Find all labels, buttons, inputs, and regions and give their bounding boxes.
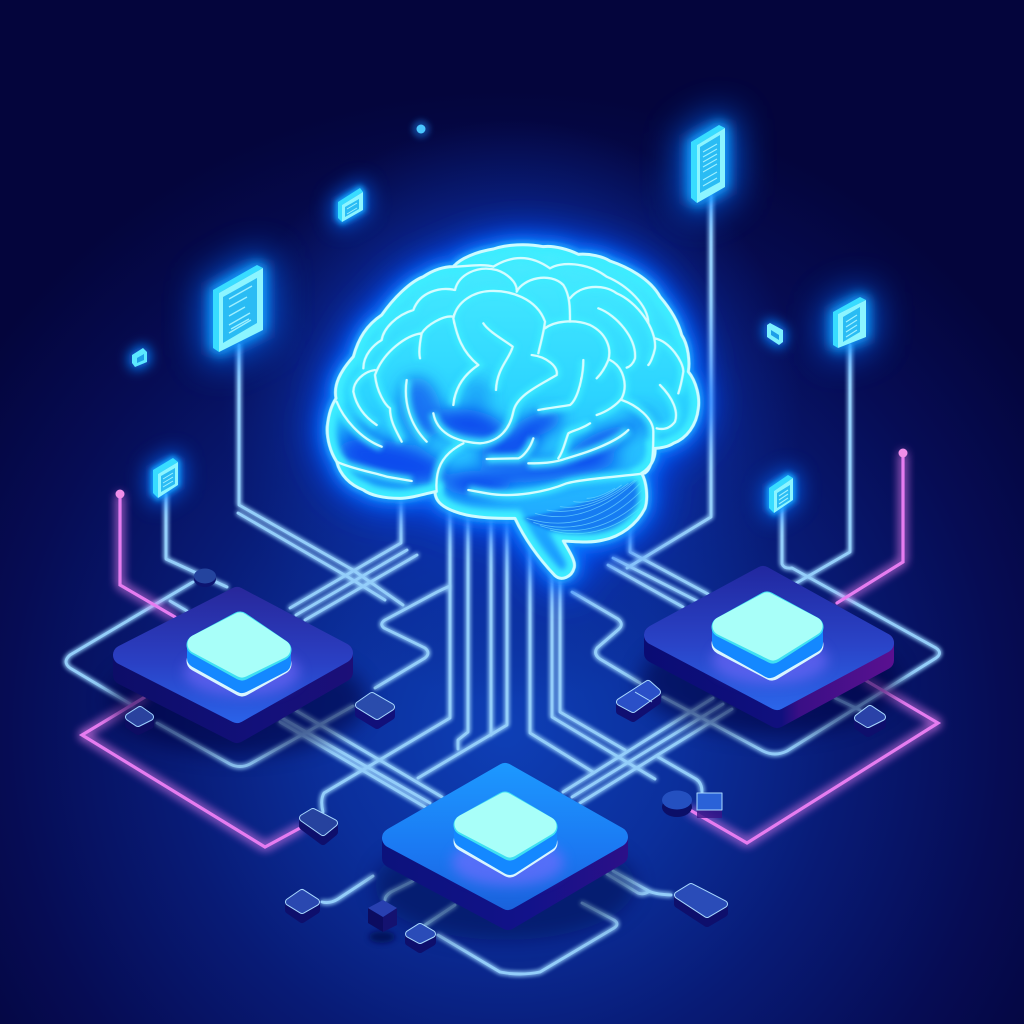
cube: bottom	[368, 900, 397, 943]
small chip: right platform right	[858, 709, 882, 733]
square node: lower right	[697, 793, 722, 818]
small chip: lower left	[303, 812, 334, 841]
circuit traces	[66, 195, 940, 974]
document: top right	[691, 125, 725, 203]
pink trace: lower left	[82, 697, 302, 847]
small chip: bottom centre	[409, 927, 432, 949]
small chips	[129, 684, 882, 949]
top dot	[412, 120, 430, 138]
document: right	[833, 297, 866, 348]
pink node: right	[898, 448, 908, 458]
traces: bottom platform lower	[322, 871, 671, 974]
small chip: bottom far left	[289, 893, 316, 919]
pink traces	[82, 453, 938, 847]
brain shading	[327, 245, 699, 578]
hub node on left trace	[194, 568, 216, 587]
document: small right	[767, 323, 783, 345]
brain body	[327, 245, 699, 578]
traces: right platform left squiggle	[572, 592, 702, 792]
traces: lower left loop	[157, 586, 450, 766]
brain rim	[327, 245, 699, 578]
pink trace: upper left	[120, 495, 175, 617]
pink node: left	[116, 490, 124, 498]
pink trace: upper right	[837, 453, 903, 603]
traces: bottom to right platform	[563, 698, 732, 803]
chip: right	[722, 602, 813, 670]
traces: brain to right platform	[608, 195, 711, 607]
chip: left	[197, 622, 281, 686]
small chip: left platform	[129, 710, 150, 731]
platform: left	[107, 597, 367, 755]
brain halo	[327, 245, 699, 578]
document: left mid	[153, 458, 178, 498]
platform: right	[640, 576, 900, 735]
brain sulci	[337, 258, 683, 495]
small chip: right platform left	[620, 684, 657, 718]
document: small far left	[132, 348, 147, 367]
document: right mid	[769, 475, 793, 513]
traces: left small document and loop	[66, 495, 227, 705]
traces: brain to left platform	[290, 495, 417, 620]
document: large left	[213, 265, 263, 352]
small chip: bottom right	[678, 887, 724, 923]
pink trace: lower right	[690, 680, 938, 843]
small chip: left centre	[359, 696, 391, 725]
traces: brain verticals	[322, 510, 655, 812]
cerebellum	[522, 480, 642, 536]
round node: lower right	[662, 790, 692, 817]
document: small top left	[338, 188, 363, 222]
traces: right documents and loop	[663, 345, 940, 754]
platform: bottom	[375, 773, 635, 940]
chip: bottom	[464, 802, 547, 867]
brain	[327, 245, 699, 578]
traces: left document to hub	[238, 345, 403, 605]
traces: left to bottom platform	[280, 710, 442, 807]
